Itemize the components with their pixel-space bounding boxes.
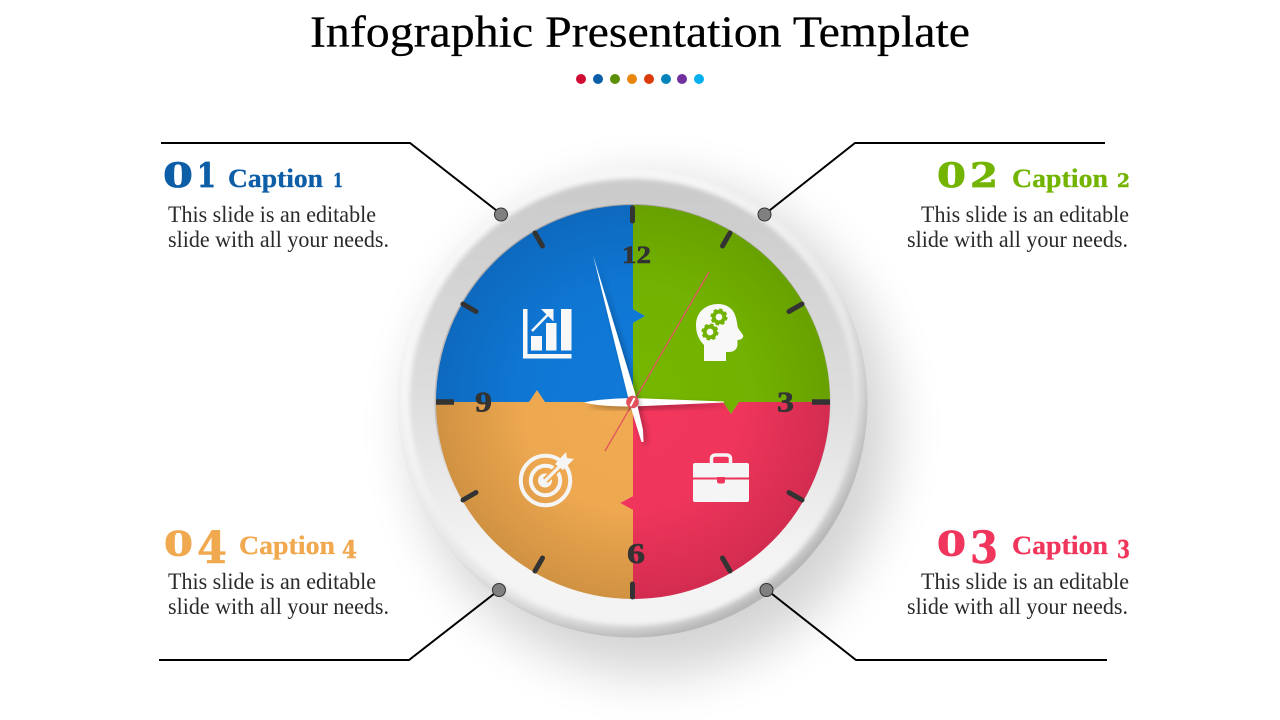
caption block 3: 3 [970,523,998,574]
icon: target [521,452,574,505]
caption block 2: Caption [1012,164,1109,193]
connector: bottom left [159,584,506,660]
caption block 4: slide with all your needs. [168,594,389,619]
connector: top right [758,143,1105,221]
clock numerals: 12 [622,242,651,269]
caption block 3 [907,523,1130,619]
quadrant: red [620,402,830,599]
caption block 2: slide with all your needs. [907,227,1128,252]
caption block 4: 4 [342,535,357,564]
icon: briefcase [693,455,749,502]
caption block 4 [164,523,389,619]
title: Infographic Presentation Template [310,8,970,56]
clock tick marks [436,208,830,597]
clock [398,168,892,674]
caption block 4: 4 [197,523,227,574]
caption block 3: slide with all your needs. [907,594,1128,619]
caption block 1: slide with all your needs. [168,227,389,252]
caption block 4: Caption [239,531,336,560]
decorative colour dots [576,74,704,84]
caption block 1: 0 [163,156,193,196]
caption block 4: This slide is an editable [168,569,376,594]
clock numerals: 3 [777,386,794,418]
quadrant: blue [436,205,645,402]
caption block 3: This slide is an editable [921,569,1129,594]
clock numerals [475,242,794,570]
caption block 1: Caption [228,164,324,193]
clock numerals: 9 [475,386,492,418]
caption block 2: 2 [970,156,998,196]
caption block 2: 0 [937,156,966,196]
caption block 1: 1 [197,156,216,196]
connector: bottom right [760,584,1107,660]
caption block 2 [907,156,1130,252]
clock face edge [434,204,830,600]
connector: top left [161,143,508,221]
caption block 3: 3 [1117,535,1130,564]
caption block 4: 0 [164,524,193,564]
icon: head with gears [696,304,743,361]
clock outer rim [398,168,868,638]
second hand [605,272,709,451]
caption block 2: 2 [1117,170,1130,192]
clock inner rim [410,179,856,625]
icon: bar chart [523,309,572,358]
caption block 1 [163,156,389,252]
centre pin [626,396,639,408]
quadrant: green [633,205,830,414]
caption block 2: This slide is an editable [921,202,1129,227]
hour hand [593,255,644,442]
caption block 3: 0 [937,524,966,564]
minute hand [584,398,724,406]
quadrant: orange [436,390,633,599]
caption block 3: Caption [1012,531,1109,560]
clock shadow [412,182,892,674]
caption block 1: This slide is an editable [168,202,376,227]
caption block 1: 1 [333,170,343,192]
clock numerals: 6 [627,538,645,570]
